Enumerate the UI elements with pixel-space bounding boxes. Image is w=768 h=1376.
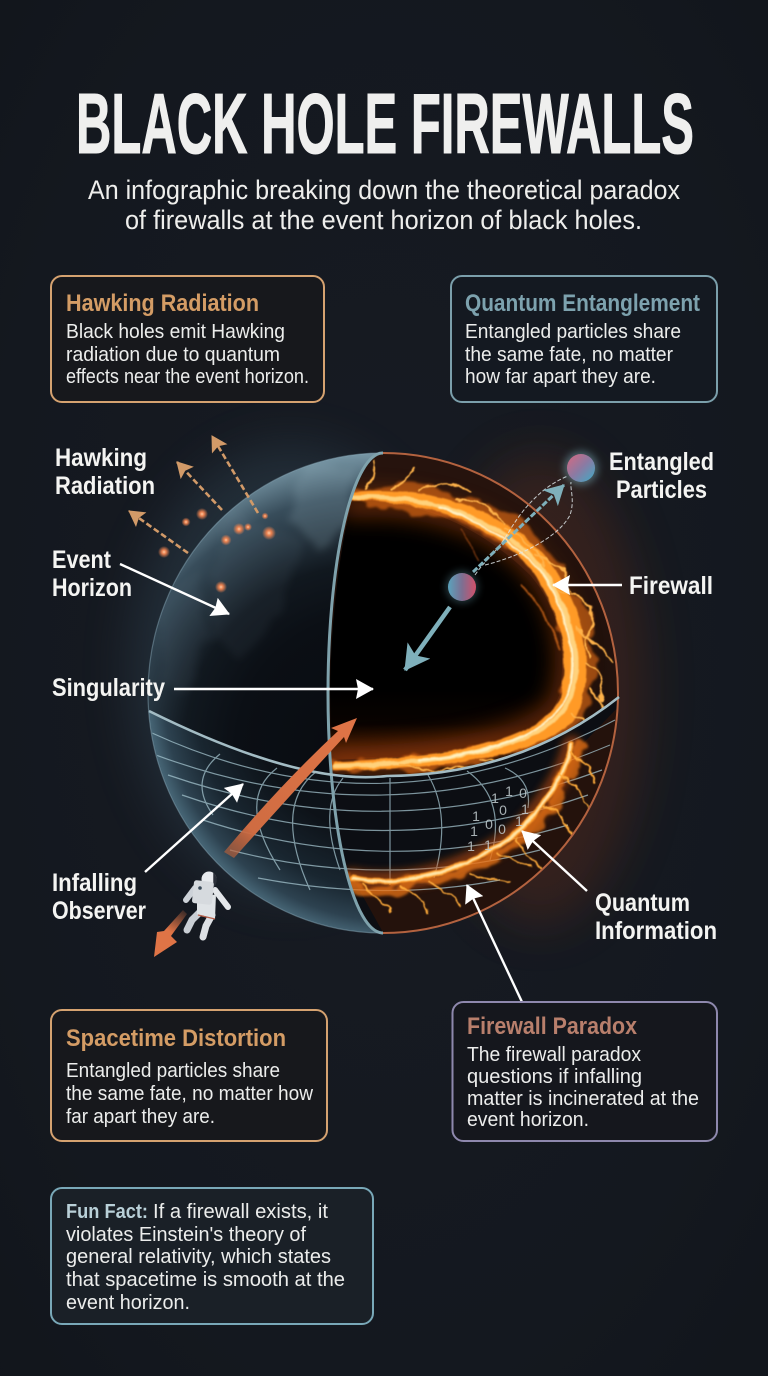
panel: Quantum Entanglement — [451, 276, 717, 402]
binary digits: quantum information: 1 — [491, 790, 499, 806]
label: Event Horizon: Horizon — [52, 574, 132, 602]
text block: Quantum Entanglement body: the same fate, no matter — [465, 343, 673, 366]
label: Quantum Information — [595, 889, 717, 945]
binary digits: quantum information — [467, 783, 529, 854]
heading: Firewall Paradox: Firewall Paradox — [467, 1013, 638, 1040]
left hemisphere surface — [148, 453, 383, 933]
label: Event Horizon — [52, 546, 132, 602]
flame core — [335, 497, 575, 766]
text block: Hawking Radiation body: Black holes emit Hawking — [66, 320, 285, 343]
binary digits: quantum information: 0 — [498, 821, 506, 837]
text block: Firewall Paradox body: questions if infalling — [467, 1065, 642, 1088]
spacetime grid — [152, 720, 615, 891]
icon: astronaut — [186, 872, 228, 937]
label: Entangled Particles: Particles — [616, 476, 707, 504]
text block: Fun Fact: violates Einstein's theory of — [66, 1223, 306, 1246]
label: Quantum Information: Quantum — [595, 889, 690, 917]
text block: Quantum Entanglement body: Entangled particles share — [465, 320, 681, 343]
binary digits: quantum information: 0 — [499, 802, 507, 818]
sphere glow — [130, 445, 645, 925]
text block: Fun Fact — [66, 1200, 345, 1314]
heading: Spacetime Distortion: Spacetime Distortion — [66, 1025, 286, 1052]
panel: Spacetime Distortion — [51, 1010, 327, 1141]
heading: Hawking Radiation: Hawking Radiation — [66, 290, 259, 317]
subtitle — [88, 175, 680, 235]
text block: Spacetime Distortion body — [66, 1059, 313, 1128]
text block: Hawking Radiation body — [66, 320, 309, 388]
text block: Quantum Entanglement body — [465, 320, 681, 388]
arrows: Hawking radiation — [129, 436, 258, 553]
text block: Hawking Radiation body: effects near the event horizon. — [66, 365, 309, 388]
panel: Hawking Radiation — [51, 276, 324, 402]
arrow: Event Horizon — [120, 564, 229, 614]
text block: Spacetime Distortion body: the same fate, no matter how — [66, 1082, 313, 1105]
binary digits: quantum information: 1 — [472, 808, 480, 824]
arrow: Quantum Information — [522, 831, 587, 891]
arrow: teal inward — [405, 607, 450, 670]
cavity — [330, 501, 562, 690]
label: Entangled Particles — [609, 448, 714, 504]
continents on event horizon — [160, 462, 352, 690]
label: Infalling Observer: Observer — [52, 897, 146, 925]
text block: Quantum Entanglement body: how far apart they are. — [465, 365, 656, 388]
particle: entangled upper — [564, 451, 598, 485]
binary digits: quantum information: 0 — [519, 785, 527, 801]
flame tongues — [333, 486, 595, 772]
label: Infalling Observer: Infalling — [52, 869, 137, 897]
cavity inner cracks — [522, 585, 560, 650]
text block: Fun Fact: event horizon. — [66, 1291, 190, 1314]
binary digits: quantum information: 0 — [485, 816, 493, 832]
label: Hawking Radiation: Hawking — [55, 444, 147, 472]
binary digits: quantum information: 1 — [505, 783, 513, 799]
text block: Fun Fact: that spacetime is smooth at the — [66, 1268, 345, 1291]
inner glow — [333, 504, 568, 760]
text block: Hawking Radiation body: radiation due to quantum — [66, 343, 280, 366]
label: Firewall: Firewall — [629, 572, 713, 600]
text block: Firewall Paradox body — [467, 1043, 699, 1131]
Hawking radiation particles — [158, 508, 276, 593]
arrow: Singularity — [174, 688, 373, 690]
diagram: black hole sphere — [148, 453, 640, 950]
seam — [328, 453, 383, 933]
heading: Quantum Entanglement: Quantum Entanglement — [465, 290, 700, 317]
lower firewall arc — [352, 745, 596, 912]
arrow: Firewall Paradox — [467, 885, 522, 1002]
label: Entangled Particles: Entangled — [609, 448, 714, 476]
lower hemisphere band — [148, 700, 617, 933]
arrow: infalling trajectory — [224, 718, 357, 858]
arrow: Infalling Observer — [145, 784, 243, 872]
label: Hawking Radiation: Radiation — [55, 472, 155, 500]
label: Hawking Radiation — [55, 444, 155, 500]
right half interior shell — [328, 453, 618, 933]
panel: Fun Fact — [51, 1188, 373, 1324]
text block: Fun Fact: Fun Fact: — [66, 1200, 148, 1223]
upper firewall ring — [333, 460, 612, 772]
text block: Firewall Paradox body: The firewall paradox — [467, 1043, 642, 1066]
text block: Fun Fact: If a firewall exists, it — [153, 1200, 328, 1223]
subtitle: An infographic breaking down the theoretical paradox — [88, 175, 680, 205]
equator — [149, 697, 619, 777]
binary digits: quantum information: 1 — [521, 801, 529, 817]
label: Quantum Information: Information — [595, 917, 717, 945]
text block: Firewall Paradox body: event horizon. — [467, 1108, 589, 1131]
text block: Spacetime Distortion body: Entangled particles share — [66, 1059, 280, 1082]
flame body — [333, 491, 587, 770]
binary digits: quantum information: 1 — [470, 823, 478, 839]
entanglement links — [475, 476, 572, 575]
arrow: Firewall — [553, 584, 622, 586]
label: Event Horizon: Event — [52, 546, 112, 574]
label: Infalling Observer — [52, 869, 146, 925]
binary digits: quantum information: 1 — [484, 837, 492, 853]
sphere rim right — [383, 453, 618, 933]
left rim light — [148, 453, 383, 933]
label: Singularity: Singularity — [52, 674, 165, 702]
text block: Spacetime Distortion body: far apart they are. — [66, 1105, 215, 1128]
text block: Fun Fact: general relativity, which states — [66, 1245, 331, 1268]
particle: entangled lower — [446, 571, 478, 603]
cavity floor — [330, 690, 561, 760]
binary digits: quantum information: 1 — [467, 838, 475, 854]
arrow: observer motion — [154, 910, 187, 957]
text block: Firewall Paradox body: matter is incinerated at the — [467, 1087, 699, 1110]
arrow: teal outward — [473, 485, 564, 572]
binary digits: quantum information: 1 — [515, 813, 523, 829]
panel: Firewall Paradox — [452, 1002, 717, 1141]
subtitle: of firewalls at the event horizon of black holes. — [125, 205, 642, 235]
